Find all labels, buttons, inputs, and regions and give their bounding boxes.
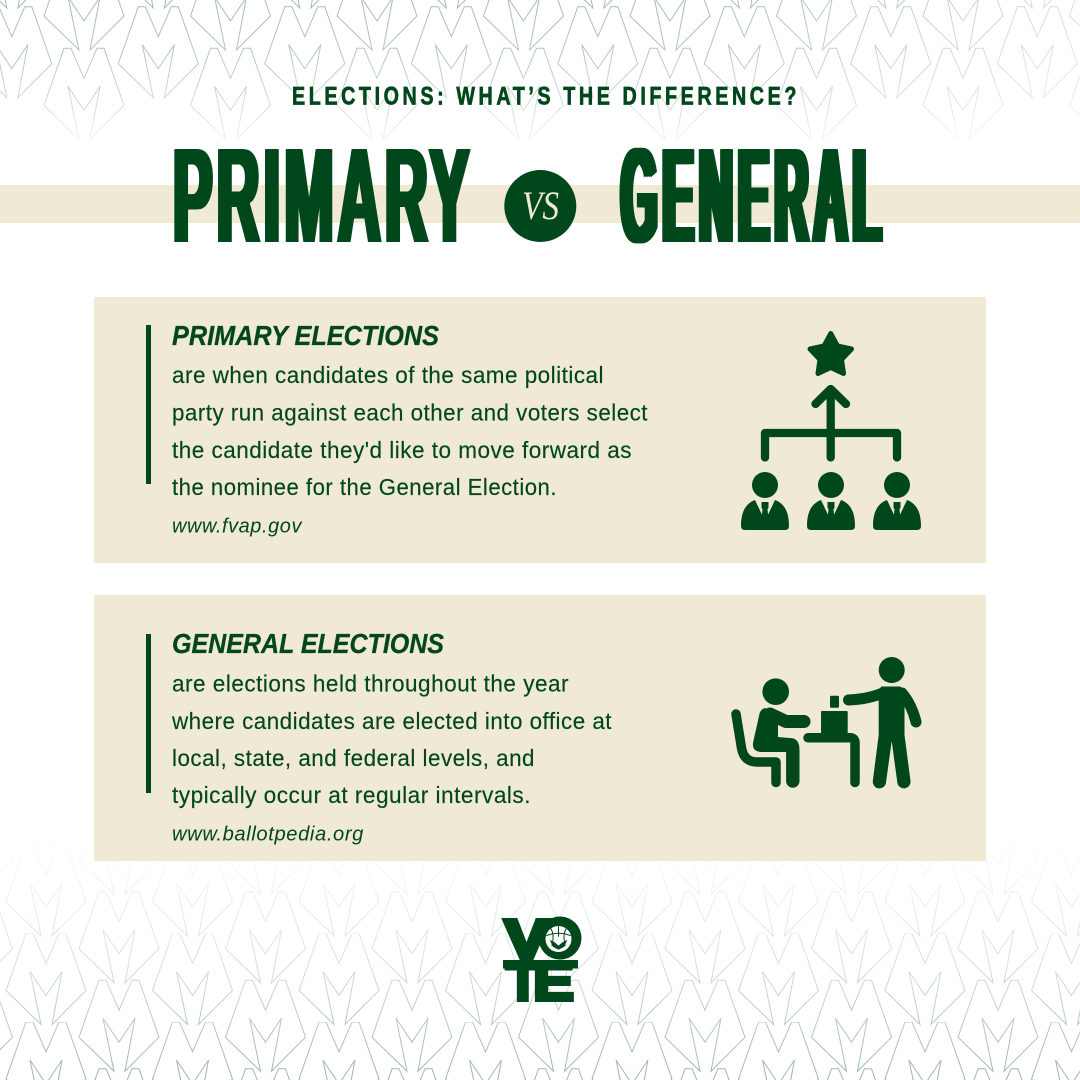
heading: general elections: GENERAL ELECTIONS (172, 628, 444, 659)
body text: where candidates are elected into office at (171, 708, 612, 734)
background pattern: bottom (0, 858, 1080, 1080)
accent bar (146, 325, 151, 484)
heading: primary elections: PRIMARY ELECTIONS (172, 320, 439, 351)
vote logo: V (505, 910, 548, 970)
body text: are when candidates of the same political (172, 362, 604, 388)
vs badge: VS (522, 183, 559, 228)
body text (171, 670, 612, 808)
vs badge (504, 170, 576, 242)
body text: the nominee for the General Election. (172, 474, 557, 500)
body text: party run against each other and voters select (172, 400, 648, 426)
basketball emblem (546, 926, 572, 952)
body text: the candidate they'd like to move forward as (172, 437, 632, 463)
icon: hierarchy with star (741, 334, 921, 530)
body text: local, state, and federal levels, and (172, 745, 535, 771)
panel: primary elections (94, 297, 986, 563)
icon: voter at polling desk (736, 657, 916, 788)
background pattern: top (0, 0, 1080, 140)
panel: general elections (94, 595, 986, 861)
body text (172, 362, 648, 500)
source link: www.fvap.gov (172, 516, 302, 538)
vote logo: O (541, 910, 579, 970)
body text: typically occur at regular intervals. (172, 782, 531, 808)
title: PRIMARY: PRIMARY (173, 120, 473, 271)
source link: www.ballotpedia.org (172, 824, 364, 846)
vote logo (501, 910, 582, 1010)
body text: are elections held throughout the year (172, 670, 569, 696)
accent bar (146, 634, 151, 793)
title: GENERAL: GENERAL (621, 120, 887, 271)
cream banner stripe (0, 185, 1080, 222)
